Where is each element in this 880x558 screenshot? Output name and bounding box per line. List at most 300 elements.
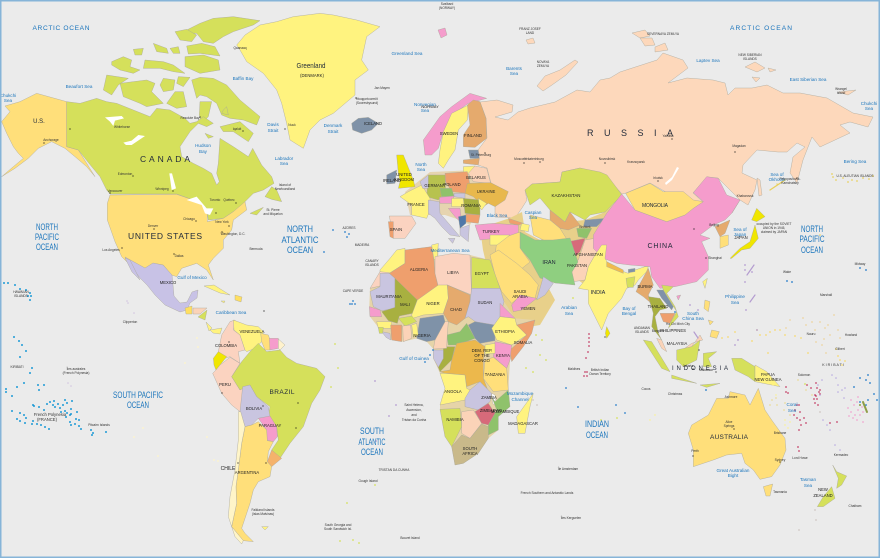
Democratic Republic of the Congo: [440, 340, 488, 392]
ocean labels: OCEAN: [586, 430, 608, 441]
small territory and city labels: Qaanaaq: [233, 46, 247, 50]
major country names: AUSTRALIA: [710, 434, 749, 441]
major country names: PARAGUAY: [259, 423, 282, 428]
Thailand: [648, 297, 667, 340]
small territory and city labels: NEW SIBERIAN: [738, 53, 762, 57]
major country names: SAUDI: [514, 289, 526, 294]
Kyrgyzstan and Tajikistan: [583, 218, 605, 227]
Chile: [228, 412, 245, 544]
Ukraine: [465, 183, 508, 207]
sea labels: [0, 51, 877, 488]
United States: [107, 194, 247, 280]
small territory and city labels: Bermuda: [250, 247, 263, 251]
major country names: ALGERIA: [410, 267, 428, 272]
Western Sahara: [370, 272, 389, 288]
Bulgaria: [465, 214, 480, 223]
Central African Republic: [447, 323, 475, 345]
small territory and city labels: Whitehorse: [114, 125, 130, 129]
Sri Lanka: [605, 327, 610, 338]
small territory and city labels: British Indian: [591, 368, 609, 372]
panel: Middle East and Asia: [490, 168, 780, 387]
small territory and city labels: Moscow: [514, 157, 527, 161]
Iraq: [495, 232, 530, 270]
Laos: [657, 290, 673, 310]
Sudan: [465, 288, 504, 325]
small territory and city labels: Ittoqqortoormiit: [356, 97, 378, 101]
ocean labels: ARCTIC OCEAN: [32, 25, 90, 32]
Greenland: [237, 13, 380, 148]
sea labels: South: [687, 311, 699, 316]
Baltic states: [468, 150, 479, 158]
Malaysia: [657, 338, 667, 352]
panel: Africa: [369, 243, 535, 465]
major country names: NORWAY: [421, 104, 439, 109]
major country names: ROMANIA: [461, 203, 481, 208]
small territory and city labels: (NORWAY): [439, 6, 455, 10]
ocean labels: PACIFIC: [35, 232, 59, 243]
Niger: [412, 285, 448, 318]
sea labels: Tasman: [800, 477, 816, 482]
sea labels: Sea: [510, 71, 519, 76]
panel: Russia: [478, 53, 873, 218]
small territory and city labels: Gough Island: [359, 479, 378, 483]
major country names: EGYPT: [475, 271, 490, 276]
small territory and city labels: ISLANDS: [743, 57, 757, 61]
sea labels: Channel: [511, 397, 529, 402]
ocean labels: NORTH: [801, 224, 823, 235]
ocean labels: ATLANTIC: [282, 235, 319, 246]
major country names: IRAN: [542, 260, 556, 266]
small territory and city labels: ANDAMAN: [634, 326, 651, 330]
major country names: SOUTH: [463, 446, 477, 451]
major country names: AFRICA: [462, 451, 478, 456]
sea labels: Hudson: [195, 143, 211, 148]
major country names: MALI: [400, 302, 410, 307]
major country names: NEW GUINEA: [754, 377, 782, 382]
small territory and city labels: NOVAYA: [537, 60, 550, 64]
major country names: [33, 61, 833, 498]
small territory and city labels: Jakarta: [683, 364, 693, 368]
Paraguay: [258, 416, 277, 442]
major country names: CHILE: [221, 466, 236, 472]
small territory and city labels: LAND: [526, 31, 535, 35]
Colombia: [218, 320, 245, 363]
Yemen: [512, 295, 537, 312]
small territory and city labels: claimed by JAPAN: [761, 230, 788, 234]
small territory and city labels: Springs: [724, 424, 735, 428]
major country names: THAILAND: [648, 304, 668, 309]
sea labels: Bay of: [622, 306, 636, 311]
ocean labels: ATLANTIC: [358, 437, 386, 448]
major country names: ARABIA: [512, 294, 528, 299]
small territory and city labels: Khabarovsk: [737, 194, 754, 198]
sea labels: Japan: [734, 232, 747, 237]
Uruguay: [267, 450, 282, 467]
Pacific and other island groups: [4, 174, 877, 543]
small territory and city labels: Saint Helena,: [404, 403, 424, 407]
Germany: [427, 175, 446, 200]
major country names: BRAZIL: [270, 389, 295, 396]
Moldova: [478, 198, 487, 210]
major country names: U.S.: [33, 119, 45, 125]
Burma: [636, 268, 653, 308]
small territory and city labels: South Georgia and: [325, 523, 352, 527]
sea labels: Arabian: [561, 305, 577, 310]
panel: South America: [213, 320, 325, 544]
panel: Europe: [387, 93, 529, 243]
major country names: OF THE: [474, 353, 490, 358]
small territory and city labels: Falkland Islands: [251, 508, 275, 512]
small territory and city labels: Solomon: [798, 373, 811, 377]
Caucasus: [508, 218, 523, 225]
sea labels: Great Australian: [717, 468, 750, 473]
major country names: CANADA: [140, 154, 190, 164]
major country names: IRELAND: [383, 178, 401, 183]
Indonesia: [643, 340, 755, 387]
Russian islands: [526, 30, 856, 196]
small territory and city labels: Krasnoyarsk: [627, 160, 645, 164]
New Zealand: [833, 465, 847, 488]
United Kingdom: [397, 155, 415, 188]
small territory and city labels: New York: [215, 220, 229, 224]
small territory and city labels: Perth: [691, 449, 699, 453]
major country names: KENYA: [496, 353, 510, 358]
sea labels: Beaufort Sea: [66, 84, 93, 89]
small territory and city labels: Ocean Territory: [589, 372, 611, 376]
major country names: JAPAN: [734, 235, 748, 240]
Poland: [445, 172, 470, 193]
major country names: SOMALIA: [514, 340, 533, 345]
Finland: [463, 100, 487, 147]
panel: Oceania: [688, 388, 847, 507]
Zimbabwe: [475, 403, 495, 425]
small territory and city labels: FRANZ JOSEF: [519, 27, 541, 31]
major country names: DEM. REP.: [472, 348, 492, 353]
small territory and city labels: Toronto: [210, 198, 221, 202]
Egypt: [472, 257, 500, 288]
sea labels: Sea: [565, 311, 574, 316]
South Sudan: [468, 322, 495, 343]
small territory and city labels: Chatham: [849, 504, 862, 508]
Botswana: [462, 410, 482, 438]
major country names: MEXICO: [160, 280, 177, 285]
Republic of the Congo: [437, 347, 455, 372]
Lake Baikal: [665, 167, 679, 185]
small territory and city labels: UNION in 1945,: [763, 226, 785, 230]
Philippines: [704, 300, 719, 338]
Greece: [460, 225, 469, 242]
ocean labels: [32, 25, 825, 458]
Portugal: [388, 222, 393, 238]
Libya: [435, 253, 472, 295]
Bangladesh: [626, 277, 635, 287]
Ethiopia: [492, 317, 527, 345]
small territory and city labels: Bishkek: [579, 225, 591, 229]
small territory and city labels: Ashmore: [725, 395, 738, 399]
small territory and city labels: Île Amsterdam: [557, 467, 579, 471]
small territory and city labels: Kermadec: [834, 453, 849, 457]
sea labels: Sea: [417, 167, 426, 172]
sea labels: Barents: [506, 66, 523, 71]
Koreas: [715, 220, 730, 237]
sea labels: Sea: [788, 408, 797, 413]
small territory and city labels: TRISTAN DA CUNHA: [379, 468, 410, 472]
major country names: ZAMBIA: [481, 395, 497, 400]
ocean labels: PACIFIC: [800, 234, 825, 245]
small territory and city labels: Jan Mayen: [374, 86, 390, 90]
small territory and city labels: Nuuk: [288, 123, 296, 127]
small territory and city labels: Yakutsk: [662, 134, 674, 138]
Belarus: [468, 166, 491, 183]
sea labels: Chukchi: [861, 101, 877, 106]
major country names: BOLIVIA: [246, 406, 262, 411]
major country names: INDIA: [591, 290, 606, 296]
Japan: [730, 208, 765, 258]
major country names: UNITED STATES: [128, 231, 202, 241]
sea labels: Sea of: [733, 227, 747, 232]
sea labels: Denmark: [324, 123, 343, 128]
Malawi: [492, 393, 497, 407]
sea labels: Strait: [328, 129, 339, 134]
Canadian Arctic islands: [103, 17, 282, 215]
Mali: [382, 278, 417, 323]
major country names: PAPUA: [761, 372, 775, 377]
Romania: [463, 198, 480, 215]
small territory and city labels: Midway: [855, 262, 866, 266]
sea labels: Caspian: [525, 210, 542, 215]
major country names: NEW: [818, 487, 828, 492]
Nepal: [607, 262, 623, 273]
sea labels: Sea: [731, 300, 740, 305]
small territory and city labels: Tasmania: [773, 490, 787, 494]
small territory and city labels: Los Angeles: [102, 248, 120, 252]
small territory and city labels: Anchorage: [43, 138, 59, 142]
major country names: SUDAN: [478, 300, 492, 305]
small territory and city labels: Christmas: [668, 392, 683, 396]
small territory and city labels: CANARY: [365, 259, 379, 263]
Tasmania: [763, 484, 773, 496]
Czechia, Austria, Hungary: [440, 188, 454, 197]
Bhutan: [628, 268, 635, 273]
Switzerland and Italy: [428, 200, 460, 237]
major country names: UKRAINE: [477, 189, 496, 194]
ocean labels: OCEAN: [361, 447, 383, 458]
Kazakhstan: [525, 168, 622, 222]
major country names: ETHIOPIA: [495, 329, 515, 334]
small territory and city labels: Iqaluit: [233, 127, 241, 131]
major country names: (DENMARK): [300, 73, 324, 78]
major country names: GERMANY: [424, 183, 446, 188]
Vietnam: [662, 285, 678, 328]
sea labels: Bay: [199, 149, 208, 154]
Syria: [490, 235, 510, 245]
small territory and city labels: St. Petersburg: [471, 153, 491, 157]
major country names: BURMA: [637, 284, 653, 289]
China: [593, 177, 740, 288]
sea labels: Strait: [268, 128, 279, 133]
sea labels: Gulf of Guinea: [399, 356, 429, 361]
Alaska: [2, 93, 95, 177]
sea labels: Baffin Bay: [233, 76, 254, 81]
Mozambique: [488, 390, 510, 435]
Canadian lakes: [105, 116, 213, 215]
sea labels: Caribbean Sea: [216, 310, 247, 315]
Somalia: [510, 320, 535, 362]
sea labels: Sea of: [770, 172, 784, 177]
major country names: LIBYA: [447, 270, 459, 275]
sea labels: Davis: [267, 122, 279, 127]
small territory and city labels: K I R I B A T I: [822, 363, 844, 367]
small territory and city labels: Bouvet Island: [400, 536, 420, 540]
major country names: KAZAKHSTAN: [552, 193, 580, 198]
panel: Mexico and Central America: [125, 257, 242, 334]
major country names: FRANCE: [407, 202, 425, 207]
major country names: MONGOLIA: [642, 203, 669, 209]
major country names: KINGDOM: [394, 177, 415, 182]
small territory and city labels: Tristan da Cunha: [402, 418, 426, 422]
sea labels: Sea: [865, 106, 874, 111]
South Africa: [452, 424, 488, 465]
ocean labels: OCEAN: [287, 245, 313, 256]
Morocco: [380, 248, 405, 273]
small territory and city labels: CAPE VERDE: [343, 289, 363, 293]
small territory and city labels: Nauru: [807, 332, 816, 336]
Papua New Guinea: [755, 365, 780, 387]
small territory and city labels: Chicago: [183, 217, 195, 221]
Mongolia: [626, 183, 703, 222]
small territory and city labels: Svalbard: [441, 2, 454, 6]
Kenya: [493, 342, 512, 368]
small territory and city labels: Îles australes: [66, 367, 86, 371]
Ecuador: [213, 352, 227, 370]
Algeria: [389, 247, 438, 302]
major country names: VENEZUELA: [240, 329, 265, 334]
Spain: [389, 216, 416, 238]
Eritrea: [500, 303, 515, 318]
Nigeria: [417, 315, 445, 342]
Oman: [537, 277, 553, 300]
sea labels: Okhotsk: [769, 177, 786, 182]
ocean labels: INDIAN: [585, 419, 609, 430]
small territory and city labels: Vancouver: [107, 189, 123, 193]
small territory and city labels: and Miquelon: [263, 212, 283, 216]
small territory and city labels: and: [411, 413, 417, 417]
small territory and city labels: occupied by the SOVIET: [757, 222, 792, 226]
small territory and city labels: French Southern and Antarctic Lands: [521, 491, 574, 495]
small territory and city labels: Makassar: [699, 368, 714, 372]
sea labels: Philippine: [725, 294, 745, 299]
small territory and city labels: ISLANDS: [365, 263, 379, 267]
major country names: FINLAND: [464, 133, 482, 138]
Taiwan: [703, 278, 707, 288]
major country names: RUSSIA: [587, 128, 673, 138]
Africa base land: [369, 243, 535, 465]
major country names: NAMIBIA: [446, 417, 464, 422]
small territory and city labels: ISLANDS: [635, 330, 649, 334]
small territory and city labels: St. Pierre: [266, 208, 280, 212]
major country names: MOZAMBIQUE: [491, 409, 520, 414]
Gabon: [433, 350, 443, 367]
small territory and city labels: AZORES: [342, 226, 356, 230]
ocean labels: NORTH: [287, 224, 313, 235]
small territory and city labels: Ho Chi Minh City: [666, 322, 690, 326]
small territory and city labels: Petropavlovsk-: [779, 177, 801, 181]
major country names: PAKISTAN: [567, 263, 587, 268]
ocean labels: OCEAN: [801, 245, 823, 256]
Cambodia: [660, 313, 675, 323]
India: [578, 245, 648, 330]
Sweden: [438, 105, 468, 168]
Balkans: [448, 208, 462, 223]
small territory and city labels: French Polynesia: [34, 412, 67, 417]
small territory and city labels: Ascension,: [406, 408, 422, 412]
small territory and city labels: Magadan: [732, 144, 746, 148]
small territory and city labels: (Scoresbysund): [356, 101, 378, 105]
major country names: YEMEN: [521, 306, 535, 311]
Madagascar: [517, 393, 533, 433]
major country names: PHILIPPINES: [660, 328, 686, 333]
major country names: PERU: [219, 382, 231, 387]
Uganda: [485, 343, 495, 354]
sea labels: Sea: [529, 215, 538, 220]
sea labels: Mediterranean Sea: [430, 248, 470, 253]
small territory and city labels: MADEIRA: [355, 243, 370, 247]
small territory and city labels: Îles Kerguelen: [560, 516, 581, 520]
major country names: CONGO: [474, 358, 491, 363]
major country names: CHAD: [450, 307, 462, 312]
Chad: [443, 285, 470, 325]
sea labels: Gulf of Mexico: [177, 275, 207, 280]
small territory and city labels: Edmonton: [118, 172, 132, 176]
major country names: AFGHANISTAN: [573, 252, 603, 257]
small territory and city labels: (FRANCE): [37, 417, 58, 422]
small territory and city labels: Bangkok: [652, 329, 665, 333]
sea labels: Black Sea: [487, 213, 508, 218]
small territory and city labels: KIRIBATI: [10, 365, 24, 369]
sea labels: Bengal: [622, 311, 636, 316]
major country names: MAURITANIA: [376, 294, 402, 299]
small territory and city labels: Wrangel: [835, 87, 847, 91]
Turkey: [475, 223, 518, 240]
sea labels: Bight: [728, 473, 739, 478]
small territory and city labels: Howland: [845, 333, 857, 337]
small territory and city labels: Kamchatsky: [781, 181, 799, 185]
city markers: [44, 98, 797, 463]
small territory and city labels: ZEMLYA: [537, 64, 550, 68]
ocean labels: OCEAN: [36, 242, 58, 253]
sea labels: North: [415, 162, 427, 167]
ocean labels: OCEAN: [127, 400, 149, 411]
major country names: SPAIN: [390, 227, 402, 232]
sea labels: East Siberian Sea: [790, 77, 827, 82]
major country names: MALAYSIA: [667, 341, 688, 346]
sea labels: Greenland Sea: [392, 51, 423, 56]
sea labels: Norwegian: [414, 102, 436, 107]
small territory and city labels: Clipperton: [123, 320, 137, 324]
Bolivia: [240, 385, 270, 427]
small territory and city labels: Resolute Bay: [181, 116, 200, 120]
Uzbekistan and Turkmenistan: [550, 210, 580, 230]
small territory and city labels: Dallas: [175, 254, 184, 258]
ocean labels: ARCTIC OCEAN: [730, 25, 792, 32]
Australia: [688, 388, 786, 479]
Brazil: [232, 343, 325, 458]
major country names: INDONESIA: [672, 366, 728, 372]
small territory and city labels: Shanghai: [708, 256, 722, 260]
Southwest Asia base land: [480, 196, 630, 330]
Iran: [520, 232, 578, 285]
France: [400, 185, 430, 218]
